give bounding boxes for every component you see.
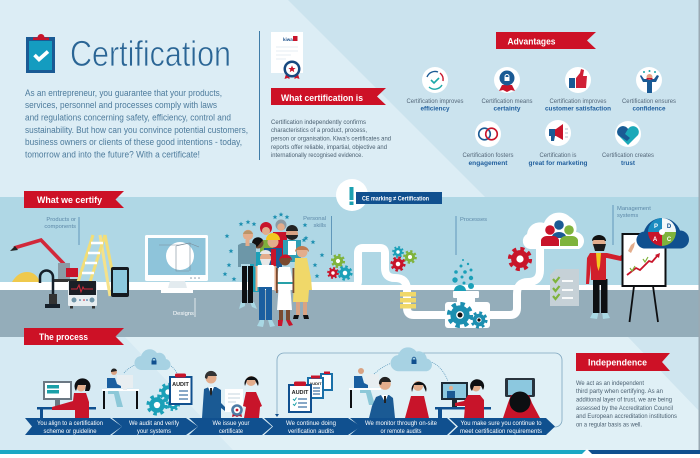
icon: efficiency — [422, 67, 448, 93]
heading: independence — [576, 353, 670, 371]
intro text: sustainability. But how can you convince potential customers, — [25, 125, 248, 135]
process step labels: or remote audits — [380, 428, 422, 435]
text: what certification is: Certification independently confirms — [271, 119, 366, 126]
text: advantage labels: great for marketing — [528, 160, 588, 167]
icon: step 4 audit clipboards: AUDIT — [292, 390, 309, 396]
illustration: group of people — [238, 220, 312, 327]
process step labels: your systems — [137, 428, 171, 435]
icon: kiwa certificate — [271, 32, 303, 79]
person: woman in white dress — [276, 254, 294, 326]
illustration: ladder — [78, 235, 117, 296]
icon: PDCA cloud: C — [667, 237, 672, 243]
process step labels: scheme or guideline — [44, 428, 97, 435]
process step labels: We monitor through on-site — [365, 420, 438, 427]
callout: CE marking: CE marking ≠ Certification — [362, 196, 429, 202]
icon: certainty — [494, 67, 520, 93]
heading: what certification is: What certification is — [281, 93, 363, 104]
illustration: tablet — [111, 267, 129, 297]
process step labels: verification audits — [288, 428, 334, 435]
text: independence: third party when certifying. As an — [576, 388, 663, 395]
label: products or components: components — [44, 224, 76, 230]
loop bracket — [277, 353, 562, 427]
intro text: business owners or clients of these good intentions - today, — [25, 137, 242, 147]
illustration: step 1 woman at computer — [37, 378, 96, 418]
process step labels: You align to a certification — [37, 420, 104, 427]
icon: PDCA cloud: A — [653, 237, 658, 243]
process step labels: We continue doing — [286, 420, 337, 427]
icon: gears group left — [328, 255, 351, 279]
illustration: excavator and pile — [10, 240, 78, 282]
text: what certification is: person or organisation. Kiwa's certificates and — [271, 136, 392, 142]
icon: step 4 audit clipboards — [288, 372, 333, 413]
text: advantage labels: engagement — [468, 160, 508, 167]
panel: advantages icons — [422, 67, 662, 147]
process step labels: meet certification requirements — [460, 428, 542, 435]
illustration: step 6 woman at video call — [435, 379, 491, 418]
person: man in grey-blue shirt — [238, 230, 257, 309]
icon: step 4 audit clipboards: AUDIT — [309, 381, 322, 386]
process step labels: You make sure you continue to — [460, 420, 542, 427]
intro text: services, personnel and processes comply with laws — [25, 100, 217, 110]
heading: advantages — [496, 32, 596, 49]
process step labels: We issue your — [212, 420, 250, 427]
icon: checklist — [550, 269, 579, 306]
icon: step 2 gears — [148, 384, 179, 414]
text: advantage labels: Certification improves — [550, 99, 606, 105]
heading: what we certify — [24, 191, 124, 208]
label: personal skills — [303, 216, 332, 255]
intro text: As an entrepreneur, you guarantee that your products, — [25, 88, 222, 98]
person: woman in yellow dress — [293, 246, 312, 319]
label: management systems: systems — [617, 213, 638, 219]
text: advantage labels: confidence — [632, 106, 666, 112]
icon: bubbles — [452, 259, 474, 291]
heading: independence: Independence — [588, 358, 647, 368]
icon: kiwa certificate: kiwa — [283, 37, 293, 42]
text: advantage labels: Certification is — [540, 153, 576, 159]
heading: the process — [24, 328, 124, 345]
icon: barrel — [400, 292, 416, 308]
text: advantage labels: certainty — [494, 106, 521, 112]
text: advantage labels: Certification improves — [406, 99, 464, 105]
text: independence: and European accreditation institutions — [576, 413, 677, 420]
illustration: monitor with design — [145, 235, 208, 293]
illustration: robot arm — [40, 270, 60, 308]
icon: step 2 audit clipboard — [169, 374, 192, 405]
process step labels: We audit and verify — [129, 420, 180, 427]
text: advantage labels: Certification ensures — [622, 99, 676, 105]
process step labels — [37, 420, 542, 435]
icon: big red gear — [510, 249, 530, 269]
label: management systems: Management — [617, 206, 651, 212]
label: designs — [173, 298, 195, 317]
icon: PDCA cloud: P — [654, 224, 658, 230]
text: independence: assessed by the Accreditation Council — [576, 405, 673, 412]
text: what certification is: characteristics of a product, process, — [271, 127, 367, 134]
intro text — [25, 88, 248, 160]
label: products or components — [44, 217, 79, 245]
stars around people — [223, 212, 324, 281]
process chevrons — [25, 418, 555, 435]
label: personal skills: skills — [313, 223, 326, 229]
heading: advantages: Advantages — [508, 36, 556, 46]
illustration: step 6 woman with tablet — [503, 378, 540, 418]
text: advantage labels: Certification means — [482, 99, 532, 105]
icon: trust — [615, 121, 641, 147]
process step labels: certificate — [219, 428, 244, 435]
illustration: flipchart — [622, 234, 666, 322]
intro text: and regulations concerning safety, efficiency, control and — [25, 112, 231, 122]
icon: confidence — [636, 67, 662, 93]
icon: marketing — [545, 120, 571, 146]
label: products or components: Products or — [46, 217, 76, 223]
icon: gears group middle — [392, 247, 416, 270]
text: advantage labels: customer satisfaction — [545, 106, 611, 112]
text: independence: We act as an independent — [576, 380, 644, 387]
label: processes: Processes — [460, 217, 487, 223]
heading: what we certify: What we certify — [37, 195, 102, 205]
label: processes — [456, 216, 487, 255]
text: advantage labels: efficiency — [420, 106, 450, 112]
icon: clipboard with check — [26, 34, 55, 73]
callout: CE marking — [336, 179, 442, 211]
icon: step 2 audit clipboard: AUDIT — [172, 382, 190, 388]
label: personal skills: Personal — [303, 216, 326, 222]
white road and pipe — [0, 240, 540, 315]
illustration: pump — [445, 291, 490, 328]
text: advantage labels — [406, 99, 676, 167]
illustration: step 5 auditor at desk — [349, 368, 381, 408]
label: designs: Designs — [173, 311, 194, 317]
text: independence — [576, 380, 677, 428]
text: advantage labels: Certification creates — [602, 153, 654, 159]
text: what certification is: internationally recognised evidence. — [271, 152, 363, 159]
illustration: step 5 man and woman talking — [369, 377, 429, 418]
illustration: test machine — [68, 281, 97, 308]
icon: step 5 cloud with lock — [374, 347, 448, 381]
text: advantage labels: trust — [621, 160, 636, 167]
icon: people cloud — [523, 213, 584, 249]
text: advantage labels: Certification fosters — [462, 153, 514, 159]
icon: step 2 cloud with lock — [124, 349, 177, 373]
illustration: presenter — [586, 235, 631, 319]
icon: customer satisfaction — [565, 67, 591, 93]
icon: PDCA cloud — [636, 218, 689, 249]
illustration: step 3 issuing certificate — [202, 371, 262, 418]
text: what certification is — [271, 119, 392, 159]
heading: the process: The process — [39, 332, 88, 342]
icon: engagement — [475, 121, 501, 147]
illustration: step 2 auditor at desk — [102, 368, 139, 409]
intro text: tomorrow and into the future? With a certificate! — [25, 150, 200, 160]
text: what certification is: reports offer reliable, impartial, objective and — [271, 144, 388, 151]
text: independence: on a regular basis as well. — [576, 422, 642, 428]
text: independence: additional layer of trust, we are being — [576, 396, 672, 404]
back row people — [250, 220, 301, 292]
heading: what certification is — [271, 88, 386, 105]
label: management systems — [613, 205, 651, 245]
title: Certification — [70, 33, 231, 74]
person: bearded man in white shirt — [256, 250, 276, 327]
icon: PDCA cloud: D — [667, 224, 672, 230]
